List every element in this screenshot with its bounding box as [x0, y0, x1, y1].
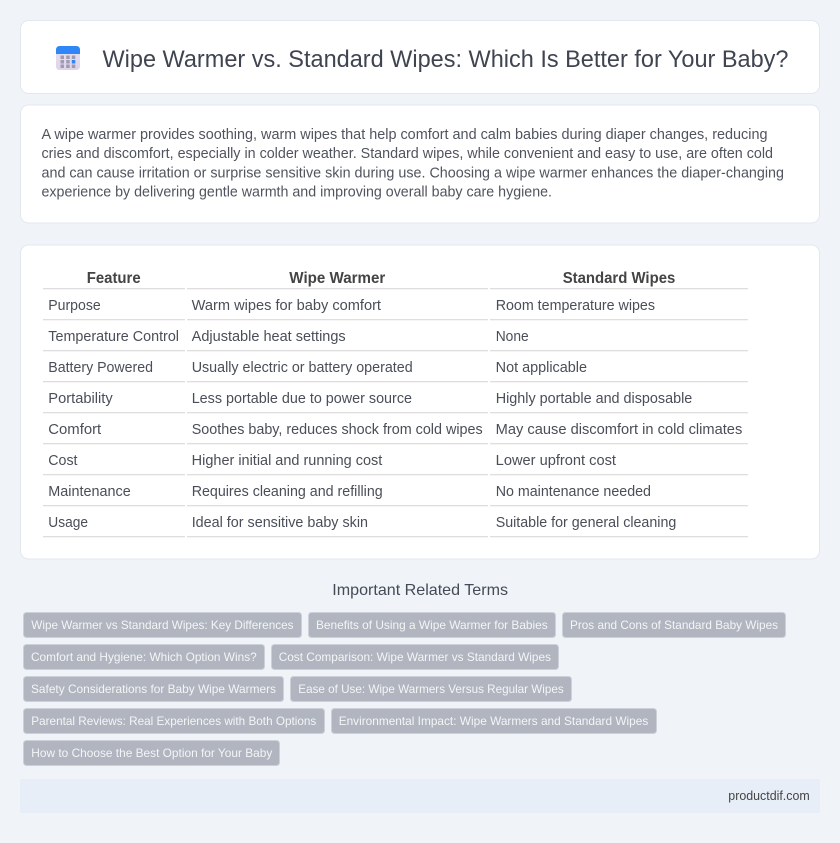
row: usage: [48, 515, 676, 531]
tag: comfort and hygiene: [24, 644, 264, 670]
row: battery powered: Battery Powered: [48, 360, 153, 376]
row: comfort: Soothes baby, reduces shock from cold wipes: [192, 422, 483, 438]
tag: pros and cons: Pros and Cons of Standard Baby Wipes: [570, 618, 778, 632]
tag: safety: [24, 676, 284, 702]
tag: pros and cons: [562, 612, 786, 638]
row: comfort: Comfort: [48, 422, 101, 438]
tag: benefits: Benefits of Using a Wipe Warmer for Babies: [316, 618, 548, 632]
row: maintenance: Maintenance: [48, 484, 131, 500]
tag: cost comparison: [272, 644, 558, 670]
row: cost: [48, 453, 616, 469]
row: portability: Less portable due to power source: [192, 391, 412, 407]
tag: comfort and hygiene: Comfort and Hygiene: Which Option Wins?: [31, 650, 257, 664]
text block: intro: [42, 127, 784, 201]
tag: environmental impact: Environmental Impact: Wipe Warmers and Standard Wipes: [339, 714, 648, 728]
row: portability: Portability: [48, 391, 114, 407]
tag: how to choose: [24, 740, 280, 766]
row: maintenance: No maintenance needed: [496, 484, 651, 500]
icon: calendar: [56, 46, 80, 70]
row: cost: Lower upfront cost: [496, 453, 616, 469]
row: battery powered: Usually electric or battery operated: [192, 360, 413, 376]
table header: Feature: [87, 270, 141, 287]
footer: productdif.com: [728, 789, 810, 803]
footer: [20, 779, 820, 813]
tag: environmental impact: [332, 708, 656, 734]
text block: intro: cries and discomfort, especially in colder weather. Standard wipes, while convenient and easy to use, are often cold: [42, 146, 773, 162]
row: portability: [48, 391, 692, 407]
row: battery powered: [48, 360, 587, 376]
tag: ease of use: Ease of Use: Wipe Warmers Versus Regular Wipes: [298, 682, 564, 696]
tag: how to choose: How to Choose the Best Option for Your Baby: [31, 746, 272, 760]
tag: key differences: Wipe Warmer vs Standard Wipes: Key Differences: [31, 618, 294, 632]
table header: [87, 270, 675, 287]
tag: benefits: [308, 612, 556, 638]
heading: important related terms: Important Related Terms: [332, 582, 508, 599]
row: purpose: Room temperature wipes: [496, 298, 655, 314]
row: usage: Usage: [48, 515, 88, 531]
text block: intro: A wipe warmer provides soothing, warm wipes that help comfort and calm babies during diaper changes, reducing: [42, 127, 767, 143]
tag: key differences: [24, 612, 302, 638]
row: temperature control: None: [496, 329, 529, 345]
tag: parental reviews: [24, 708, 324, 734]
row: purpose: Warm wipes for baby comfort: [192, 298, 381, 314]
row: purpose: [48, 298, 655, 314]
table header: Wipe Warmer: [289, 270, 385, 287]
row: comfort: [48, 422, 742, 438]
panel: title card: [20, 20, 820, 94]
panel: related term tags: [24, 612, 786, 766]
row: temperature control: [48, 329, 529, 345]
title: Wipe Warmer vs. Standard Wipes: Which Is Better for Your Baby?: [102, 46, 788, 73]
tag: safety: Safety Considerations for Baby Wipe Warmers: [31, 682, 276, 696]
text block: intro: and can cause irritation or surprise sensitive skin during use. Choosing a wipe warmer enhances the diaper-changing: [42, 165, 784, 181]
row: cost: Cost: [48, 453, 78, 469]
panel: intro paragraph: [20, 105, 820, 223]
row: cost: Higher initial and running cost: [192, 453, 382, 469]
panel: comparison table: [20, 245, 820, 559]
tag: cost comparison: Cost Comparison: Wipe Warmer vs Standard Wipes: [279, 650, 551, 664]
tag: ease of use: [290, 676, 572, 702]
row: usage: Suitable for general cleaning: [496, 515, 676, 531]
table header: Standard Wipes: [563, 270, 675, 287]
row: temperature control: Adjustable heat settings: [192, 329, 346, 345]
row: temperature control: Temperature Control: [48, 329, 179, 345]
row: portability: Highly portable and disposable: [496, 391, 692, 407]
row: battery powered: Not applicable: [496, 360, 587, 376]
row: maintenance: Requires cleaning and refilling: [192, 484, 383, 500]
row: usage: Ideal for sensitive baby skin: [192, 515, 368, 531]
tag: parental reviews: Parental Reviews: Real Experiences with Both Options: [31, 714, 316, 728]
text block: intro: experience by delivering gentle warmth and improving overall baby care hygiene.: [42, 185, 552, 201]
row: purpose: Purpose: [48, 298, 101, 314]
row: maintenance: [48, 484, 651, 500]
row: comfort: May cause discomfort in cold climates: [496, 422, 742, 438]
